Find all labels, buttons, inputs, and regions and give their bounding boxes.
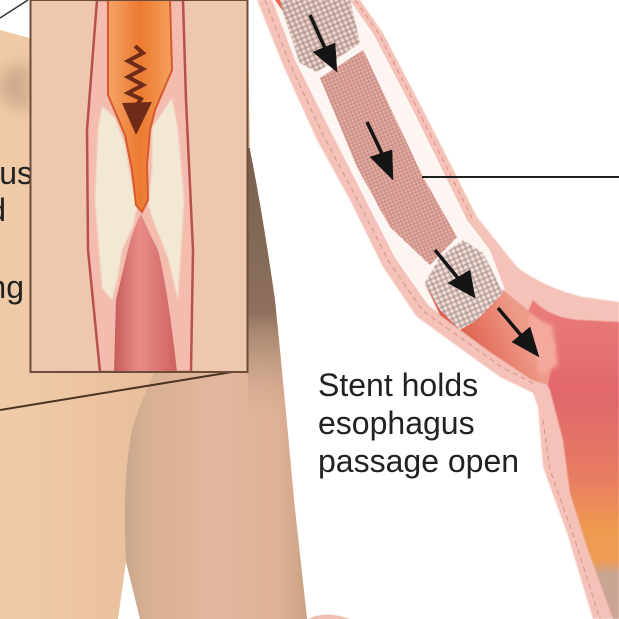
- tumor tissue left: [95, 106, 137, 300]
- zigzag arrow: [122, 46, 152, 135]
- caption: stent holds esophagus passage open: Stent holds: [318, 367, 478, 403]
- lower stent flare: [425, 240, 503, 330]
- upper stent flare: [280, 0, 360, 72]
- wall stitch lines: [265, 0, 600, 619]
- esophagus with stent: [257, 0, 619, 619]
- caption: stent holds esophagus passage open: [318, 367, 519, 479]
- white fatty layer: [272, 0, 505, 318]
- callout line: top of inset: [0, 0, 28, 18]
- caption: stent holds esophagus passage open: esophagus: [318, 405, 475, 441]
- outer wall and stomach wall: [257, 0, 619, 619]
- label fragments left of inset: [0, 155, 33, 305]
- red sliver above stent: [275, 0, 286, 13]
- red passage below stent: [425, 283, 556, 385]
- arrow 2: [367, 122, 393, 180]
- label fragments left of inset: us: [0, 155, 33, 191]
- narrowed food passage: [108, 0, 172, 212]
- stent body: [320, 50, 457, 265]
- caption: stent holds esophagus passage open: passage open: [318, 443, 519, 479]
- stomach interior: [520, 300, 619, 619]
- esophagus wall in inset: [87, 0, 193, 372]
- tumor tissue right: [148, 98, 184, 300]
- lower esophagus lumen: [114, 214, 177, 372]
- arrow 4: [498, 308, 539, 357]
- tissue at bottom edge: [308, 614, 350, 619]
- arrow 1: [310, 15, 337, 72]
- leader line to stent: [422, 176, 619, 178]
- arrow 3: [435, 250, 475, 298]
- callout line: bottom of inset: [0, 372, 232, 410]
- pale striations at stomach entrance: [528, 315, 558, 375]
- body figure: [0, 30, 320, 619]
- inset panel: narrowed esophagus: [30, 0, 248, 372]
